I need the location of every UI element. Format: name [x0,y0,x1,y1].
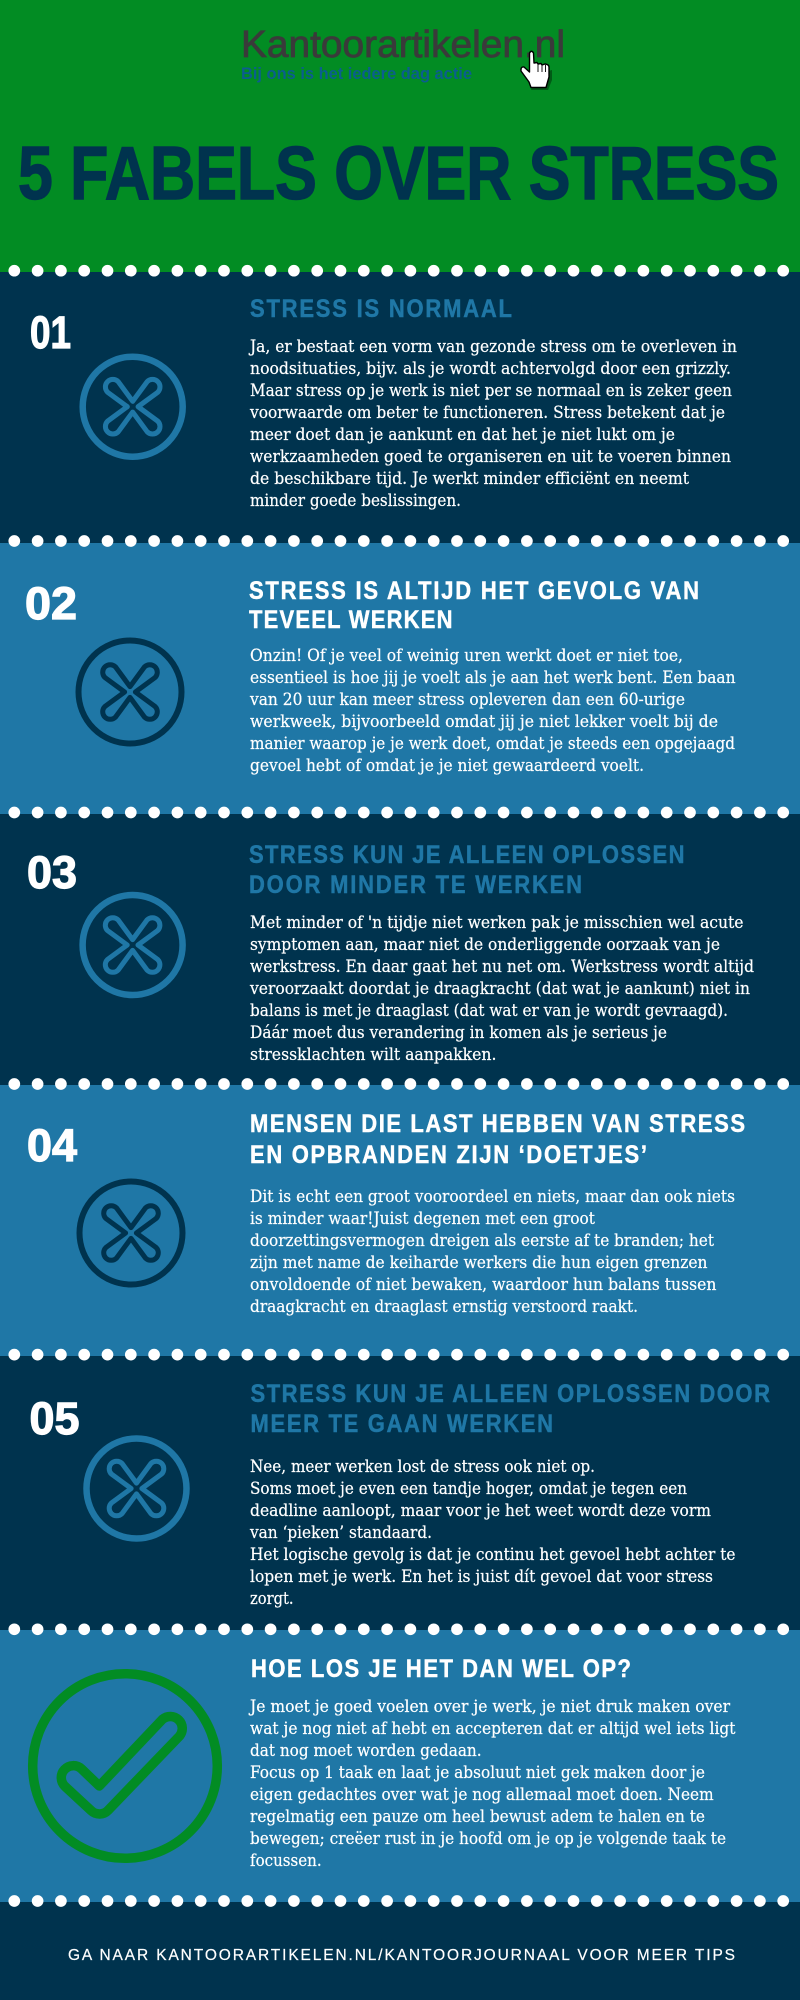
logo tagline: Bij ons is het iedere dag actie [241,64,472,83]
body text: Ja, er bestaat een vorm van gezonde stress om te overleven in [248,337,737,357]
number 03: 03 [27,847,77,898]
heading [249,841,685,898]
body text: lopen met je werk. En het is juist dít gevoel dat voor stress [250,1567,713,1587]
body text: Met minder of 'n tijdje niet werken pak je misschien wel acute [250,913,744,933]
footer call to action: GA NAAR KANTOORARTIKELEN.NL/KANTOORJOURNAAL VOOR MEER TIPS [68,1947,735,1964]
panel: header [0,0,800,272]
body text: werkzaamheden goed te organiseren en uit te voeren binnen [250,447,731,467]
body text: manier waarop je je werk doet, omdat je steeds een opgejaagd [250,734,735,754]
body text: zijn met name de keiharde werkers die hun eigen grenzen [250,1253,708,1273]
heading: TEVEEL WERKEN [249,606,453,633]
body text: Onzin! Of je veel of weinig uren werkt doet er niet toe, [250,646,683,666]
panel: fable 05 [0,1356,800,1630]
body text: Nee, meer werken lost de stress ook niet op. [250,1457,595,1477]
heading: HOE LOS JE HET DAN WEL OP? [251,1655,631,1682]
body text: draagkracht en draaglast ernstig verstoord raakt. [250,1297,638,1317]
body text: voorwaarde om beter te functioneren. Stress betekent dat je [249,403,725,423]
panel: solution [0,1630,800,1902]
heading: STRESS IS ALTIJD HET GEVOLG VAN [249,577,699,604]
body text: doorzettingsvermogen dreigen als eerste af te branden; het [250,1231,714,1251]
body text: onvoldoende of niet bewaken, waardoor hun balans tussen [250,1275,717,1295]
icon: cross in circle [82,895,183,995]
heading [250,1110,745,1168]
icon: cross in circle [86,1438,187,1539]
body text: werkstress. En daar gaat het nu net om. Werkstress wordt altijd [250,957,754,977]
number 01: 01 [30,307,71,358]
body text: balans is met je draaglast (dat wat er van je wordt gevraagd). [250,1001,728,1021]
body text: deadline aanloopt, maar voor je het weet wordt deze vorm [250,1501,711,1521]
body text: eigen gedachtes over wat je nog allemaal moet doen. Neem [250,1785,714,1805]
body text: van 20 uur kan meer stress opleveren dan een 60-urige [249,690,685,710]
heading: STRESS IS NORMAAL [250,295,512,322]
body text: dat nog moet worden gedaan. [250,1741,482,1761]
body text [249,913,754,1065]
body text: regelmatig een pauze om heel bewust adem te halen en te [250,1807,705,1827]
body text [248,337,737,511]
body text: essentieel is hoe jij je voelt als je aan het werk bent. Een baan [250,668,736,688]
body text [250,1187,735,1317]
body text: Dáár moet dus verandering in komen als je serieus je [250,1023,667,1043]
body text: wat je nog niet af hebt en accepteren dat er altijd wel iets ligt [250,1719,736,1739]
body text: zorgt. [250,1589,294,1609]
panel: fable 03 [0,814,800,1085]
body text: veroorzaakt doordat je draagkracht (dat wat je aankunt) niet in [249,979,750,999]
heading: STRESS KUN JE ALLEEN OPLOSSEN DOOR [250,1380,770,1407]
body text: van ‘pieken’ standaard. [249,1523,432,1543]
heading: MENSEN DIE LAST HEBBEN VAN STRESS [250,1110,745,1137]
body text: Maar stress op je werk is niet per se normaal en is zeker geen [250,381,732,401]
body text: meer doet dan je aankunt en dat het je niet lukt om je [250,425,675,445]
body text: Soms moet je even een tandje hoger, omdat je tegen een [250,1479,687,1499]
body text: Focus op 1 taak en laat je absoluut niet gek maken door je [250,1763,705,1783]
body text: minder goede beslissingen. [250,491,461,511]
icon: check mark in circle [33,1674,217,1858]
heading: DOOR MINDER TE WERKEN [249,871,582,898]
body text [249,646,736,776]
icon: cross in circle [78,640,182,744]
body text: Het logische gevolg is dat je continu het gevoel hebt achter te [250,1545,736,1565]
heading: EN OPBRANDEN ZIJN ‘DOETJES’ [250,1141,647,1168]
body text [248,1697,736,1871]
panel: footer [0,1902,800,2000]
heading: STRESS KUN JE ALLEEN OPLOSSEN [249,841,685,868]
panel: fable 04 [0,1085,800,1356]
body text: is minder waar!Juist degenen met een groot [250,1209,595,1229]
body text: symptomen aan, maar niet de onderliggende oorzaak van je [250,935,720,955]
logo wordmark: Kantoorartikelen.nl [241,24,565,66]
panel: fable 02 [0,543,800,814]
icon: hand cursor [521,51,552,90]
number 05: 05 [30,1393,80,1444]
body text: Dit is echt een groot vooroordeel en niets, maar dan ook niets [250,1187,735,1207]
body text: Je moet je goed voelen over je werk, je niet druk maken over [248,1697,731,1717]
body text: de beschikbare tijd. Je werkt minder efficiënt en neemt [250,469,689,489]
body text: stressklachten wilt aanpakken. [250,1045,496,1065]
icon: cross in circle [80,1182,182,1284]
number 04: 04 [27,1120,77,1171]
icon: cross in circle [82,356,183,457]
heading [250,1380,770,1437]
body text: gevoel hebt of omdat je je niet gewaardeerd voelt. [250,756,644,776]
number 02: 02 [25,578,77,629]
body text [249,1457,736,1609]
body text: bewegen; creëer rust in je hoofd om je op je volgende taak te [250,1829,726,1849]
panel: fable 01 [0,272,800,543]
body text: werkweek, bijvoorbeeld omdat jij je niet lekker voelt bij de [250,712,718,732]
heading [249,577,699,633]
body text: noodsituaties, bijv. als je wordt achtervolgd door een grizzly. [250,359,731,379]
body text: focussen. [250,1851,322,1871]
heading: MEER TE GAAN WERKEN [250,1410,553,1437]
